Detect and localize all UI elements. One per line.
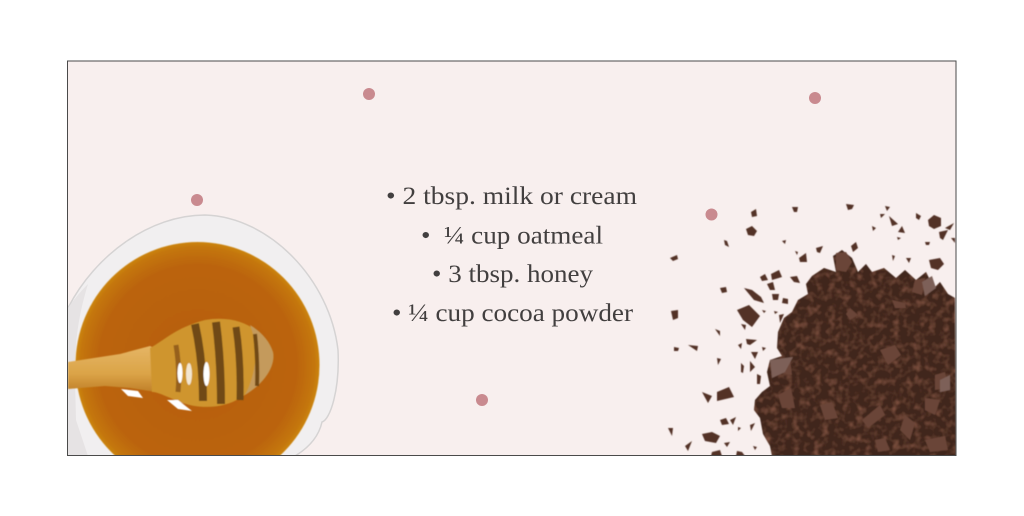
decorative dot: left above bowl (191, 194, 203, 206)
image: honey bowl with dipper (68, 214, 339, 455)
ingredient: oatmeal: • ¼ cup oatmeal (421, 222, 603, 250)
pile lighter pieces (774, 252, 948, 452)
dipper stick (68, 346, 158, 392)
pile grey highlight piece (770, 276, 950, 392)
decorative dot: top right (809, 92, 821, 104)
pile mottled texture (754, 250, 956, 456)
dipper highlights (121, 362, 210, 411)
image: cocoa nibs pile (668, 204, 956, 456)
honey (74, 241, 320, 455)
dipper (68, 319, 273, 411)
bowl shaded left side (68, 284, 88, 456)
decorative dot: bottom centre (476, 394, 488, 406)
decorative dot: above coffee (706, 208, 718, 220)
ingredient: milk or cream: • 2 tbsp. milk or cream (386, 183, 638, 210)
ingredient: cocoa powder: • ¼ cup cocoa powder (392, 300, 634, 327)
scattered nibs (668, 204, 955, 456)
bowl (68, 215, 338, 456)
dipper head (150, 318, 256, 408)
dipper grooves (176, 322, 257, 404)
decorative dot: top centre (363, 88, 375, 100)
ingredient: honey: • 3 tbsp. honey (432, 261, 594, 288)
dipper tip tint (245, 325, 273, 395)
pile base (754, 250, 956, 456)
ingredient list (386, 183, 638, 327)
panel: background (68, 61, 956, 456)
